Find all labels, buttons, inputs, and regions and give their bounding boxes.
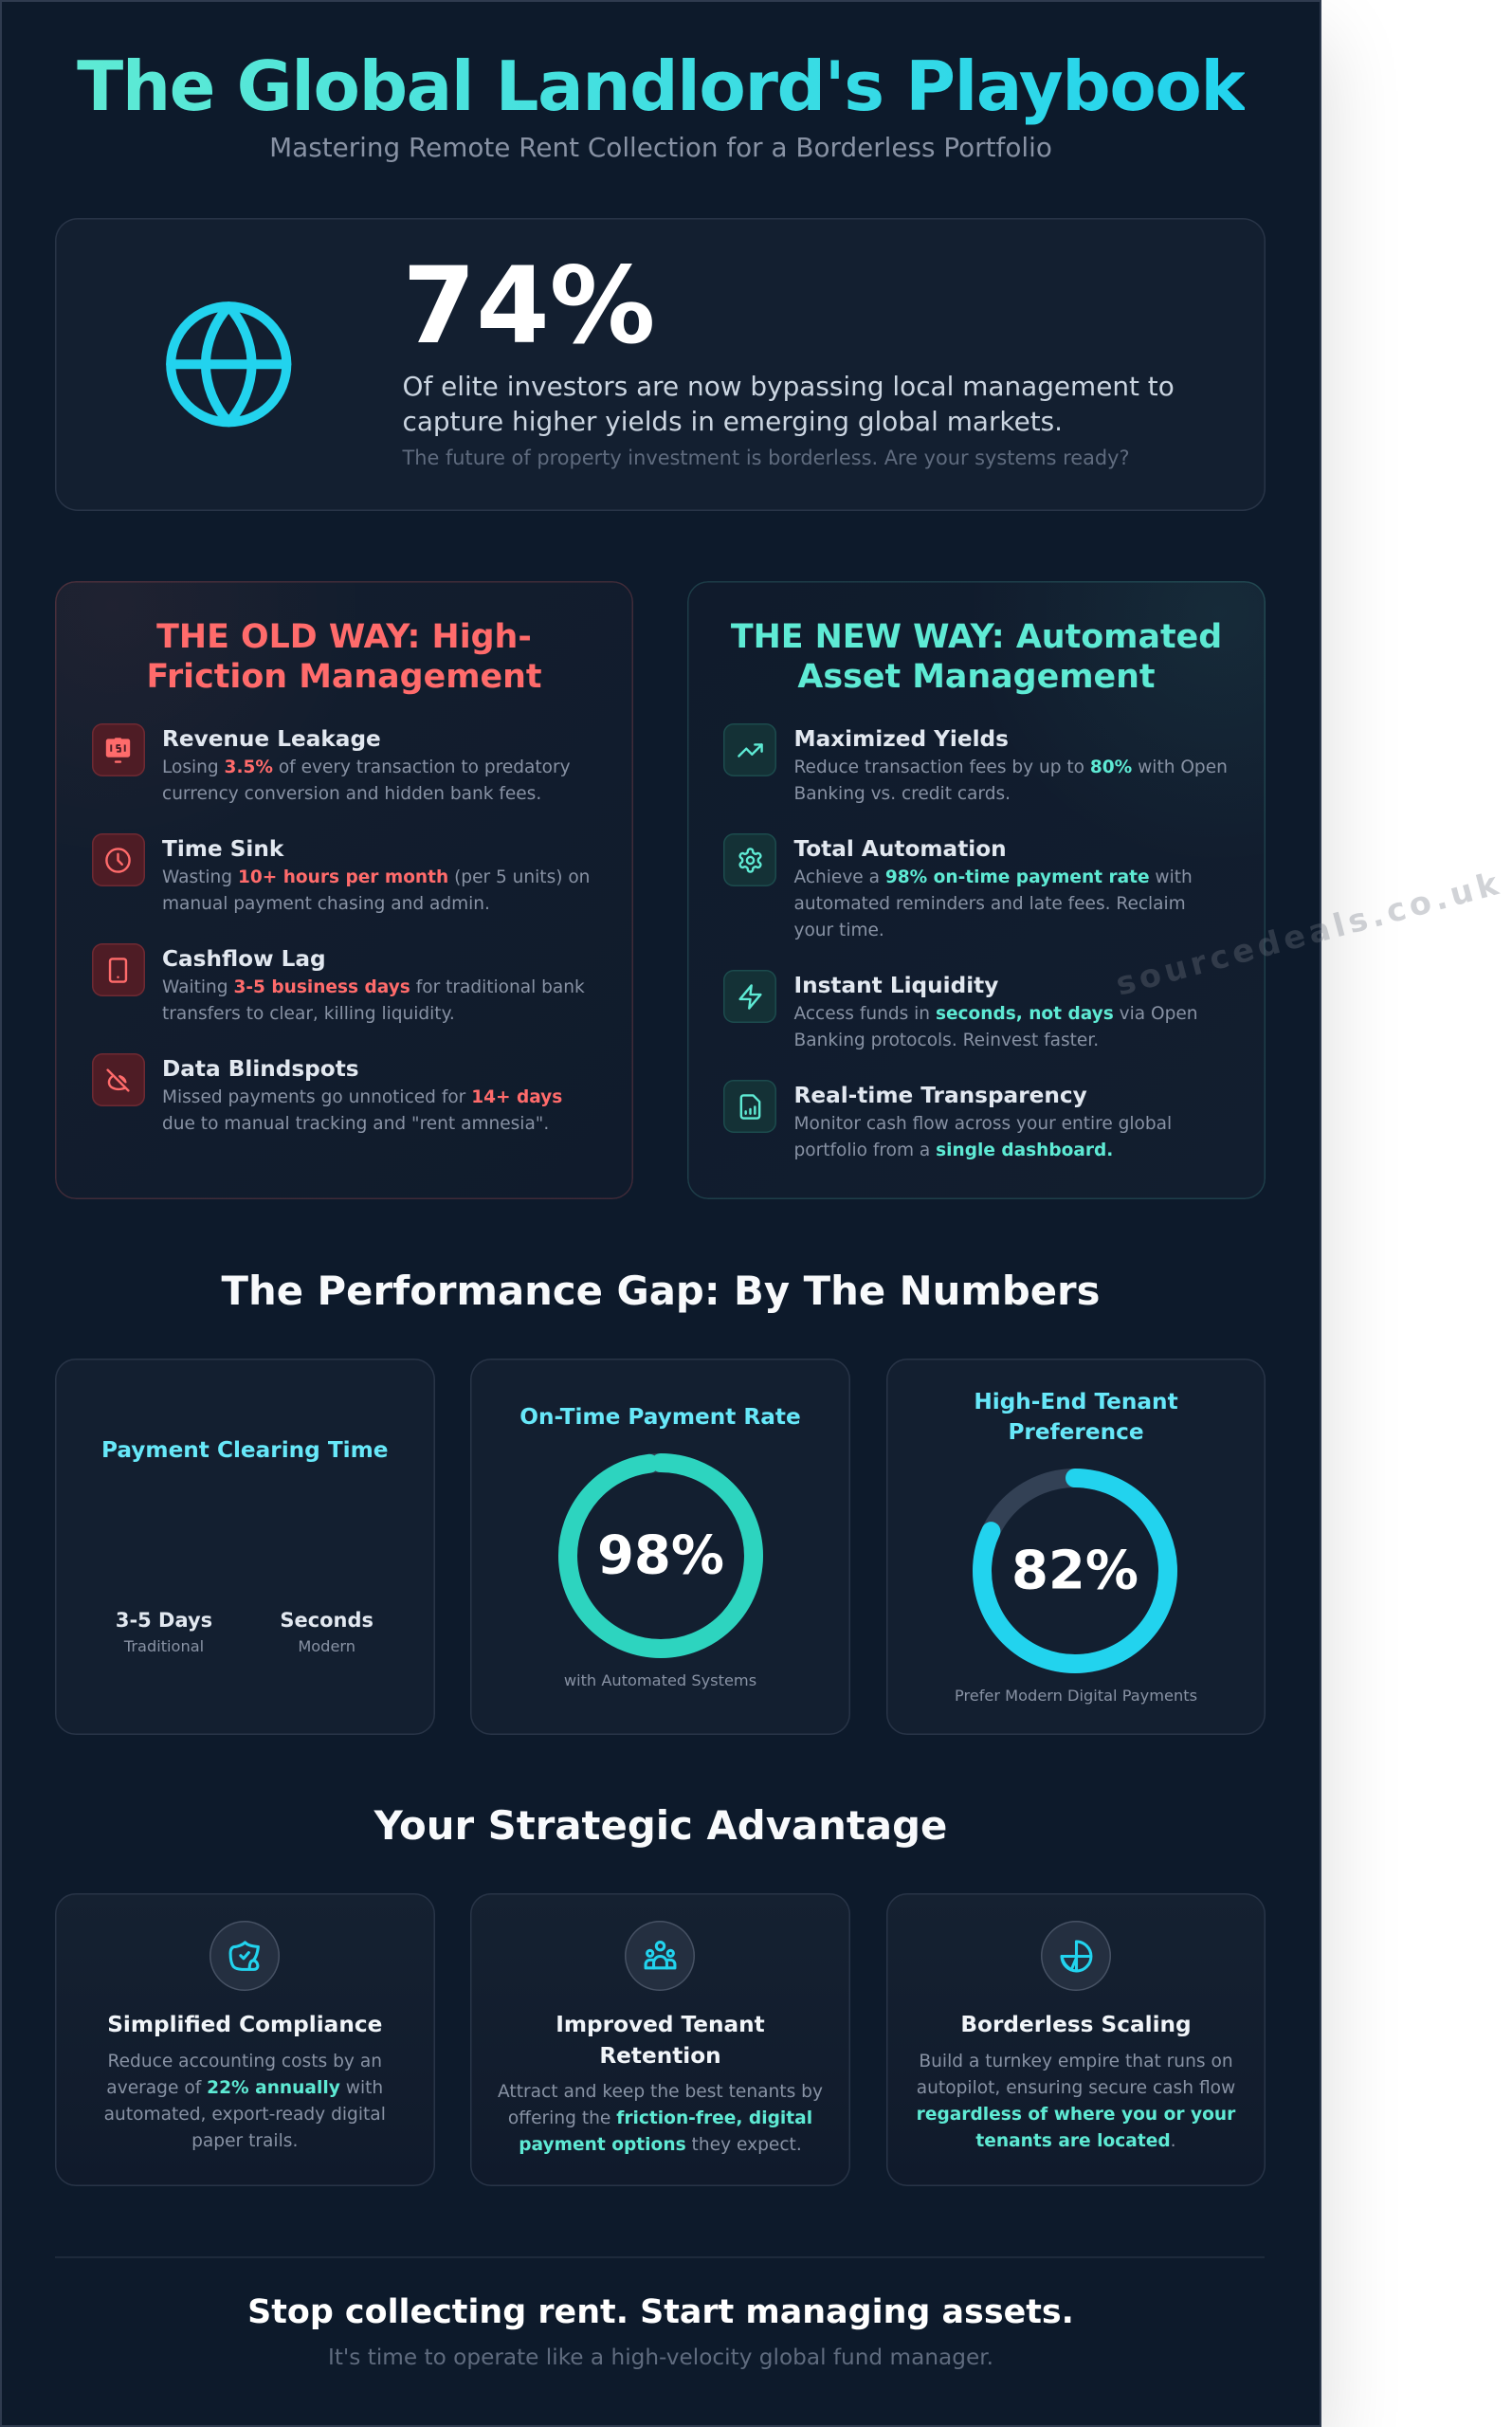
item text	[162, 757, 571, 804]
item: total automation	[723, 833, 1193, 940]
hero description	[402, 370, 1175, 437]
item text	[162, 1087, 562, 1134]
donut chart: 98%: 98%	[596, 1524, 724, 1586]
panel: simplified compliance	[55, 1893, 434, 2186]
panel: hero statistic	[55, 218, 1266, 511]
chart caption: with Automated Systems	[564, 1670, 756, 1689]
card title: Borderless Scaling	[960, 2012, 1192, 2037]
subtitle: Mastering Remote Rent Collection for a Borderless Portfolio	[269, 132, 1052, 163]
item text	[162, 867, 590, 914]
card title: Simplified Compliance	[107, 2012, 382, 2037]
card text	[498, 2082, 823, 2155]
panel: high-end tenant preference	[886, 1359, 1266, 1735]
icon: people group	[625, 1921, 695, 1991]
card text: average of 22% annually with	[106, 2078, 383, 2098]
hero description: capture higher yields in emerging global markets.	[402, 406, 1063, 437]
card text	[917, 2052, 1236, 2151]
item title: Time Sink	[162, 836, 283, 862]
card text	[104, 2052, 386, 2151]
item text: due to manual tracking and "rent amnesia".	[162, 1114, 549, 1134]
value: 3-5 Days	[116, 1608, 212, 1631]
item: maximized yields	[723, 723, 1228, 804]
watermark: sourcedeals.co.uk	[1112, 864, 1506, 1003]
item text: Missed payments go unnoticed for 14+ days	[162, 1087, 562, 1107]
item text: Waiting 3-5 business days for traditional bank	[162, 977, 585, 997]
item text	[794, 757, 1228, 804]
heading: old way: Friction Management	[146, 658, 542, 696]
card title: Retention	[599, 2042, 721, 2069]
panel: improved tenant retention	[470, 1893, 850, 2186]
icon: lightning	[723, 970, 776, 1023]
item text	[794, 1004, 1198, 1050]
item text: currency conversion and hidden bank fees.	[162, 784, 541, 804]
title: The Global Landlord's Playbook	[77, 46, 1245, 126]
item text	[794, 1114, 1172, 1160]
panel: on-time payment rate	[470, 1359, 850, 1735]
item text: Wasting 10+ hours per month (per 5 units) on	[162, 867, 590, 887]
heading: strategic advantage: Your Strategic Advantage	[374, 1802, 947, 1849]
donut chart: 98%	[558, 1453, 763, 1658]
chart title: On-Time Payment Rate	[519, 1404, 801, 1430]
item: instant liquidity	[723, 970, 1198, 1050]
card text: tenants are located.	[975, 2131, 1176, 2151]
footer subline: It's time to operate like a high-velocity global fund manager.	[328, 2345, 993, 2370]
card text: regardless of where you or your	[917, 2105, 1235, 2125]
panel: borderless scaling	[886, 1893, 1266, 2186]
heading: new way	[731, 618, 1222, 696]
heading: new way: Asset Management	[797, 658, 1156, 696]
item: cashflow lag	[92, 943, 585, 1024]
item title: Revenue Leakage	[162, 726, 381, 752]
item text	[162, 977, 585, 1024]
icon: trending up	[723, 723, 776, 776]
icon: globe	[166, 301, 292, 427]
icon: eye off	[91, 1053, 144, 1106]
comparison: traditional	[116, 1608, 212, 1655]
card text: Reduce accounting costs by an	[108, 2052, 382, 2071]
item title: Real-time Transparency	[794, 1083, 1087, 1108]
item title: Maximized Yields	[794, 726, 1009, 752]
card text: Attract and keep the best tenants by	[498, 2082, 823, 2102]
item title: Data Blindspots	[162, 1056, 359, 1082]
item text	[794, 867, 1193, 940]
item text: automated reminders and late fees. Reclaim	[794, 894, 1186, 914]
hero number: 74%	[402, 246, 655, 368]
item text: transfers to clear, killing liquidity.	[162, 1004, 455, 1024]
heading: performance gap: The Performance Gap: By The Numbers	[222, 1268, 1100, 1314]
panel: payment clearing time	[55, 1359, 434, 1735]
icon: document chart	[723, 1080, 776, 1133]
card text: payment options they expect.	[519, 2135, 802, 2155]
item text: Monitor cash flow across your entire global	[794, 1114, 1172, 1134]
heading: old way: THE OLD WAY: High-	[156, 618, 532, 656]
donut chart: 82%: 82%	[1011, 1540, 1139, 1601]
icon: banknote	[91, 723, 144, 776]
card text: Build a turnkey empire that runs on	[919, 2052, 1233, 2071]
card title: Improved Tenant	[556, 2012, 765, 2037]
item: revenue leakage	[92, 723, 571, 804]
icon: gear	[723, 833, 776, 886]
chart caption: Prefer Modern Digital Payments	[955, 1687, 1197, 1705]
chart title: High-End Tenant	[974, 1388, 1178, 1414]
item text: manual payment chasing and admin.	[162, 894, 490, 914]
item text: portfolio from a single dashboard.	[794, 1141, 1113, 1160]
item text: your time.	[794, 921, 884, 940]
item text: Reduce transaction fees by up to 80% with Open	[794, 757, 1228, 777]
card text: automated, export-ready digital	[104, 2105, 386, 2125]
footer headline: Stop collecting rent. Start managing assets.	[247, 2293, 1074, 2331]
hero description: Of elite investors are now bypassing local management to	[402, 370, 1175, 402]
donut chart: 82%	[973, 1469, 1177, 1673]
item text: Losing 3.5% of every transaction to predatory	[162, 757, 571, 777]
item text: Achieve a 98% on-time payment rate with	[794, 867, 1193, 887]
icon: clock	[91, 833, 144, 886]
card text: paper trails.	[191, 2131, 298, 2151]
heading: old way	[146, 618, 542, 696]
heading: new way: THE NEW WAY: Automated	[731, 618, 1222, 656]
item: time sink	[92, 833, 590, 914]
chart title: Preference	[1008, 1419, 1144, 1445]
chart title	[974, 1388, 1178, 1445]
item: data blindspots	[92, 1053, 562, 1134]
icon: tablet	[91, 943, 144, 996]
item text: Access funds in seconds, not days via Open	[794, 1004, 1198, 1024]
chart title: Payment Clearing Time	[101, 1437, 389, 1463]
value: Seconds	[280, 1608, 373, 1631]
item text: Banking vs. credit cards.	[794, 784, 1011, 804]
label: Modern	[298, 1637, 355, 1655]
item title: Total Automation	[794, 836, 1007, 862]
card text: autopilot, ensuring secure cash flow	[917, 2078, 1235, 2098]
label: Traditional	[124, 1637, 204, 1655]
item: real-time transparency	[723, 1080, 1172, 1160]
card text: offering the friction-free, digital	[508, 2108, 812, 2128]
icon: pie chart	[1041, 1921, 1111, 1991]
item title: Cashflow Lag	[162, 946, 326, 972]
panel: the new way	[687, 581, 1266, 1199]
icon: shield check	[209, 1921, 280, 1991]
comparison: modern	[280, 1608, 373, 1655]
panel: the old way	[55, 581, 633, 1199]
hero note: The future of property investment is borderless. Are your systems ready?	[402, 447, 1130, 469]
card title	[556, 2012, 765, 2069]
item text: Banking protocols. Reinvest faster.	[794, 1031, 1099, 1050]
item title: Instant Liquidity	[794, 973, 998, 998]
